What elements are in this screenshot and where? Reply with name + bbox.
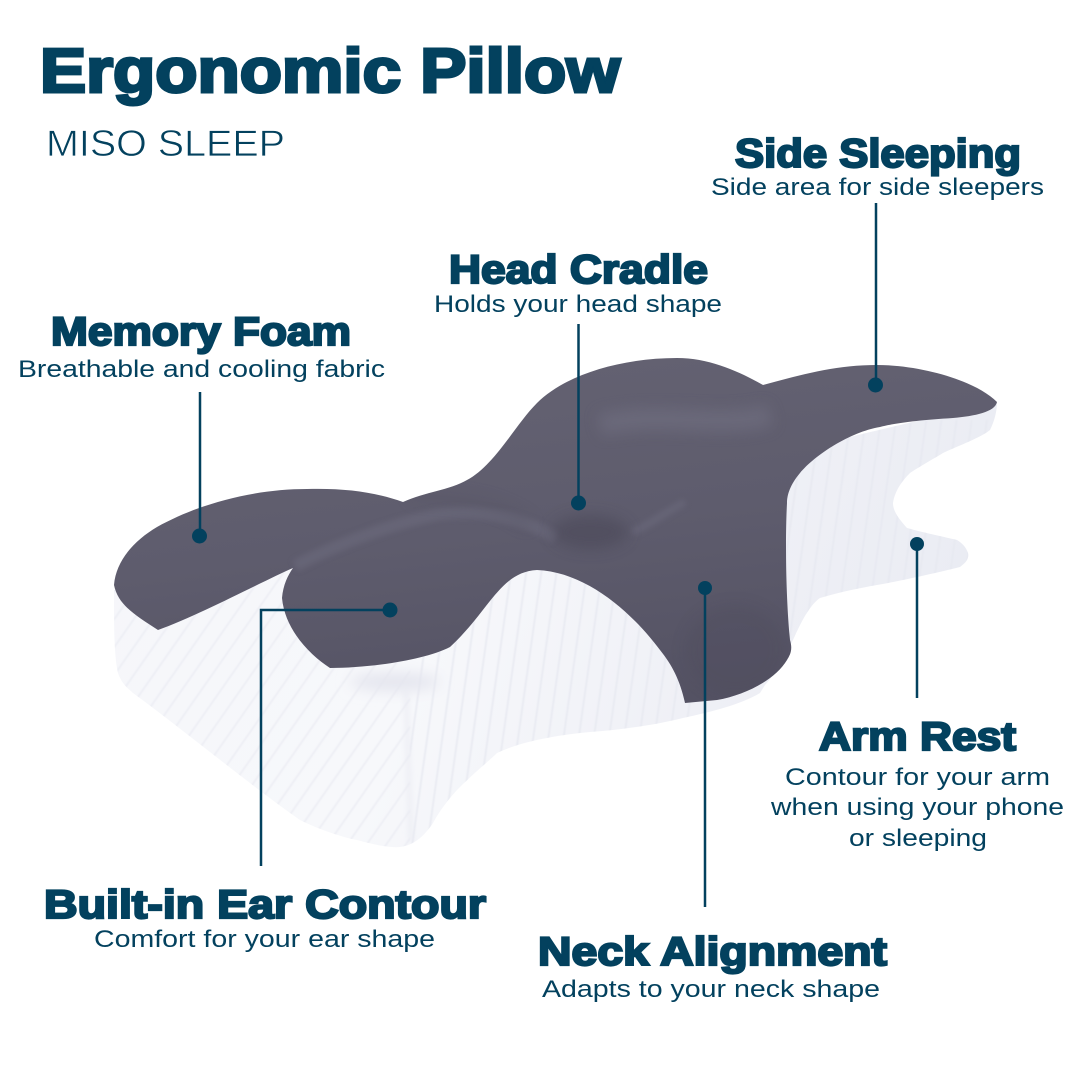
- dot: [910, 537, 924, 551]
- dot: [868, 378, 883, 392]
- leader line: [875, 203, 877, 385]
- description: Adapts to your neck shape: [542, 976, 880, 1003]
- leader line: [577, 324, 580, 503]
- description: [770, 764, 1064, 852]
- pillow fabric shading: [295, 415, 785, 695]
- callout: side sleeping: [711, 132, 1044, 392]
- description: Side area for side sleepers: [711, 174, 1044, 201]
- heading: Neck Alignment: [538, 930, 887, 974]
- callout: memory foam: [18, 310, 385, 544]
- heading: Memory Foam: [51, 310, 351, 354]
- heading: Head Cradle: [449, 248, 708, 292]
- pillow illustration: [100, 358, 1010, 860]
- description: or sleeping: [849, 825, 987, 852]
- pillow white quilted body: [100, 390, 1010, 860]
- dot: [698, 581, 712, 595]
- callout: neck alignment: [538, 581, 887, 1003]
- callout: arm rest: [770, 537, 1064, 852]
- dot: [571, 496, 586, 510]
- callout: head cradle: [434, 248, 722, 510]
- heading: Arm Rest: [819, 715, 1016, 759]
- pillow dark top fabric: [114, 358, 997, 703]
- description: Breathable and cooling fabric: [18, 356, 385, 383]
- description: Holds your head shape: [434, 291, 722, 318]
- description: Comfort for your ear shape: [94, 926, 435, 953]
- callout: built-in ear contour: [44, 602, 486, 953]
- description: when using your phone: [770, 794, 1064, 821]
- leader line: [916, 544, 918, 698]
- heading: Built-in Ear Contour: [44, 883, 486, 927]
- leader line: [261, 610, 390, 866]
- heading: Side Sleeping: [735, 132, 1021, 176]
- title: Ergonomic Pillow: [40, 37, 621, 106]
- dot: [192, 528, 207, 544]
- description: Contour for your arm: [785, 764, 1050, 791]
- leader line: [199, 392, 201, 536]
- dot: [382, 602, 398, 618]
- subtitle: MISO SLEEP: [46, 123, 285, 164]
- leader line: [704, 588, 706, 907]
